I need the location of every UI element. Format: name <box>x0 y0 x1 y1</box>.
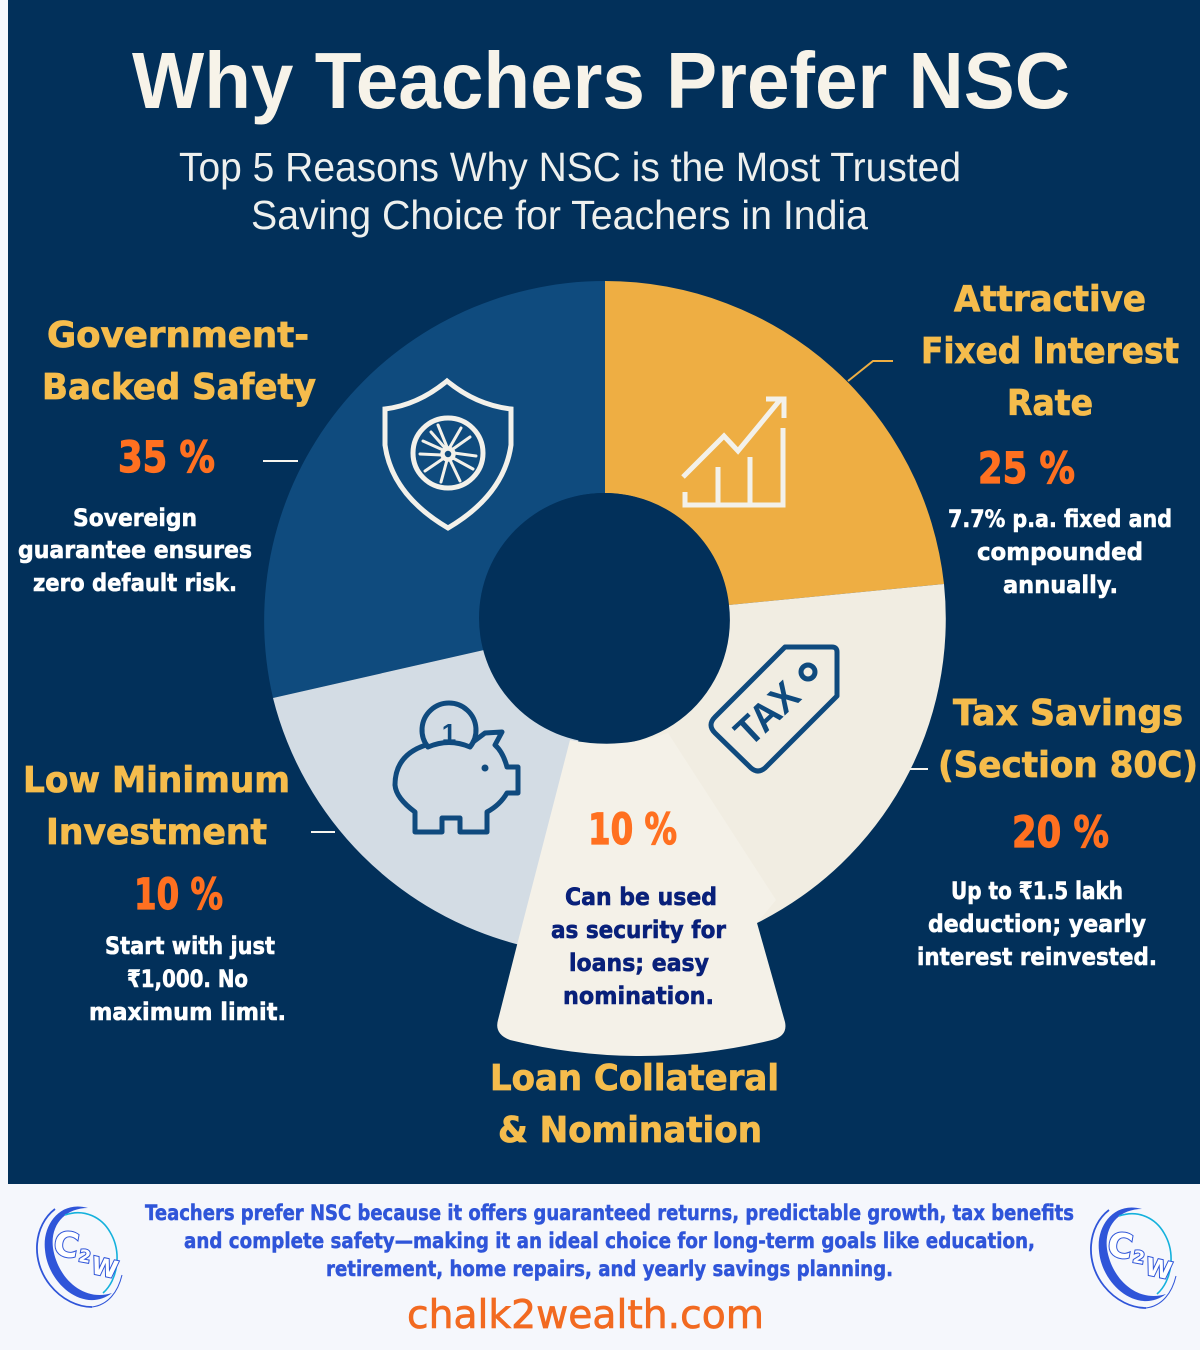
text block: tax savings: Up to ₹1.5 lakh <box>951 877 1123 905</box>
icon: tax tag: TAX <box>726 673 809 755</box>
logo: right C2W <box>1091 1207 1176 1308</box>
title: Why Teachers Prefer NSC <box>132 36 1070 125</box>
subtitle <box>179 144 961 238</box>
connector: tax <box>910 768 928 770</box>
text block: government-backed safety: zero default risk. <box>33 569 237 597</box>
logo: left C2W: 2 <box>77 1246 92 1268</box>
text block: government-backed safety: 35 % <box>118 433 215 483</box>
icon: tax tag <box>711 647 837 771</box>
text block: low minimum investment: Investment <box>46 812 267 853</box>
icon: growth chart <box>683 399 784 505</box>
logo: right C2W: 2 <box>1131 1247 1146 1269</box>
text block: attractive fixed interest rate <box>921 279 1179 599</box>
text block: attractive fixed interest rate: Attractive <box>954 279 1146 320</box>
footer summary text: Teachers prefer NSC because it offers guaranteed returns, predictable growth, tax benefits <box>145 1201 1074 1225</box>
text block: loan collateral inside tab: nomination. <box>563 982 714 1010</box>
footer summary text: retirement, home repairs, and yearly savings planning. <box>326 1257 893 1281</box>
footer summary text <box>145 1201 1074 1281</box>
text block: tax savings: Tax Savings <box>953 693 1183 734</box>
text block: loan collateral inside tab: loans; easy <box>569 949 709 977</box>
text block: low minimum investment: ₹1,000. No <box>127 965 248 993</box>
icon: shield with chakra <box>385 381 511 528</box>
footer summary text: and complete safety—making it an ideal choice for long-term goals like education, <box>184 1229 1035 1253</box>
segment: loan collateral tab 10% <box>497 733 785 1056</box>
subtitle: Saving Choice for Teachers in India <box>251 192 868 238</box>
icon: piggy bank: 1 <box>442 718 456 748</box>
text block: government-backed safety: Backed Safety <box>42 367 316 408</box>
text block: loan collateral inside tab: Can be used <box>565 883 717 911</box>
heading: loan collateral and nomination <box>490 1058 779 1151</box>
text block: government-backed safety: Sovereign <box>73 504 197 532</box>
logo: right C2W: C <box>1104 1224 1136 1268</box>
text block: government-backed safety: guarantee ensures <box>18 536 252 564</box>
connector: interest <box>848 361 893 381</box>
text block: low minimum investment: 10 % <box>134 870 223 920</box>
logo: right C2W: W <box>1143 1252 1174 1285</box>
text block: low minimum investment: Low Minimum <box>23 760 290 801</box>
text block: government-backed safety: Government- <box>47 315 309 356</box>
segment: government-backed safety 35% <box>264 281 605 698</box>
logo: left C2W: W <box>89 1251 120 1284</box>
text block: attractive fixed interest rate: Fixed Interest <box>921 331 1179 372</box>
subtitle: Top 5 Reasons Why NSC is the Most Trusted <box>179 144 961 190</box>
text block: attractive fixed interest rate: 25 % <box>978 444 1075 494</box>
donut hole <box>479 493 729 743</box>
segment: fixed interest 25% <box>605 281 944 605</box>
text block: attractive fixed interest rate: compounded <box>977 538 1143 566</box>
text block: attractive fixed interest rate: Rate <box>1007 383 1093 424</box>
heading: loan collateral and nomination: & Nomination <box>498 1110 762 1151</box>
text block: low minimum investment: maximum limit. <box>89 998 286 1026</box>
text block: loan collateral inside tab <box>551 805 726 1010</box>
text block: tax savings: deduction; yearly <box>928 910 1146 938</box>
text block: government-backed safety <box>18 315 316 597</box>
text block: tax savings: interest reinvested. <box>917 943 1157 971</box>
donut chart <box>264 281 946 1056</box>
text block: tax savings: 20 % <box>1012 808 1109 858</box>
segment: low minimum investment 10% <box>273 650 580 945</box>
connector: low minimum <box>311 831 335 833</box>
logo: left C2W <box>37 1206 122 1307</box>
segment: tax savings 20% <box>570 584 946 923</box>
heading: loan collateral and nomination: Loan Collateral <box>490 1058 779 1099</box>
text block: low minimum investment: Start with just <box>105 932 275 960</box>
text block: loan collateral inside tab: as security for <box>551 916 726 944</box>
text block: low minimum investment <box>23 760 290 1026</box>
icon: piggy bank <box>395 703 518 832</box>
text block: tax savings <box>917 693 1198 971</box>
text block: attractive fixed interest rate: annually. <box>1003 571 1118 599</box>
connector: safety <box>263 460 298 462</box>
logo: left C2W: C <box>50 1223 82 1267</box>
website link text: chalk2wealth.com <box>407 1293 764 1338</box>
text block: loan collateral inside tab: 10 % <box>588 805 677 855</box>
